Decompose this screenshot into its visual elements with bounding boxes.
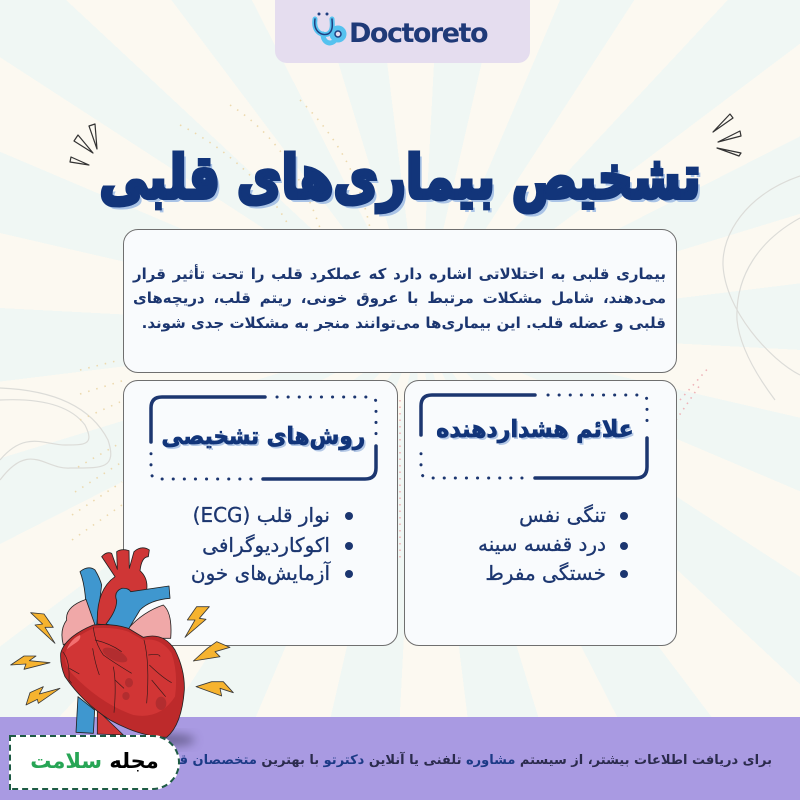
bullet list <box>191 503 353 586</box>
badge: health magazine <box>9 735 180 790</box>
bullet list: تنگی نفس <box>519 503 606 527</box>
title: تشخیص بیماری‌های قلبی <box>99 143 701 213</box>
panel: diagnostic methods <box>123 380 398 646</box>
footer message: برای دریافت اطلاعات بیشتر، از سیستم مشاوره تلفنی یا آنلاین دکترتو با بهترین متخصصان قلب <box>160 753 772 768</box>
illustration: heart with lightning bolts <box>10 547 234 752</box>
badge: health magazine: مجله سلامت <box>30 749 159 773</box>
bullet list: اکوکاردیوگرافی <box>202 533 330 557</box>
logo wordmark: Doctoreto <box>349 18 487 49</box>
heading: warning signs: علائم هشداردهنده <box>436 415 634 443</box>
heading frame <box>149 395 378 481</box>
panel: warning signs <box>404 380 677 646</box>
bullet list <box>478 503 628 585</box>
panel: introduction <box>123 229 677 373</box>
icon: stethoscope <box>312 12 346 46</box>
bullet list: درد قفسه سینه <box>478 532 606 556</box>
heading: diagnostic methods: روش‌های تشخیصی <box>162 422 365 450</box>
footer band <box>0 717 800 800</box>
bullet list: خستگی مفرط <box>485 561 606 585</box>
intro text line 2: می‌دهند، شامل مشکلات مرتبط با عروق خونی، ریتم قلب، دریچه‌های <box>133 289 666 307</box>
bullet list: نوار قلب (ECG) <box>193 503 330 527</box>
icon: title sparkles <box>69 113 742 166</box>
logo panel <box>275 0 530 63</box>
intro text line 3: قلبی و عضله قلب. این بیماری‌ها می‌توانند منجر به مشکلات جدی شوند. <box>142 314 666 332</box>
intro text line 1: بیماری قلبی به اختلالاتی اشاره دارد که عملکرد قلب را تحت تأثیر قرار <box>133 265 666 283</box>
bullet list: آزمایش‌های خون <box>191 561 330 585</box>
heading frame <box>419 393 649 480</box>
